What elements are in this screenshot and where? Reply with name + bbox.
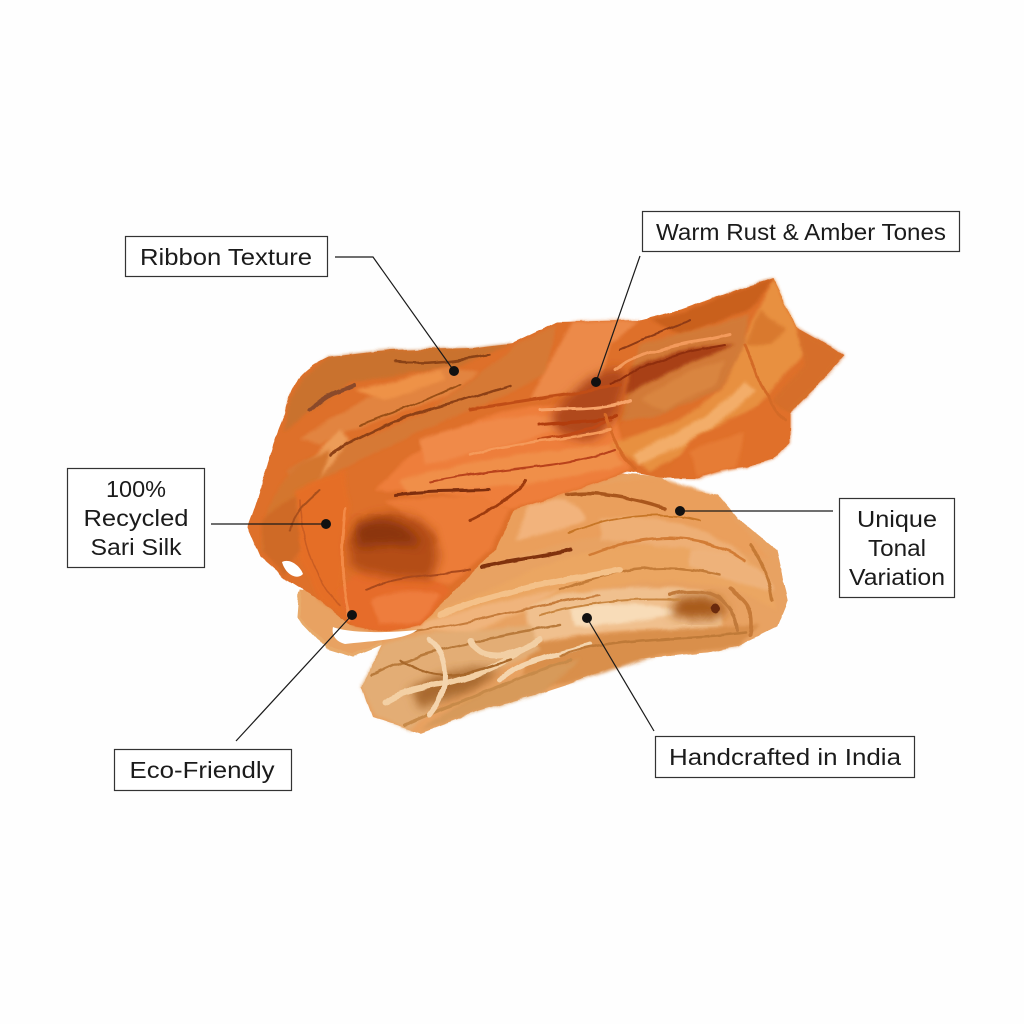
callout: 100% Recycled Sari Silk [68, 468, 331, 568]
gap: small hole at left [282, 561, 303, 577]
upper rust orange skein [247, 279, 845, 632]
right big band [610, 279, 805, 472]
upper peach panel [530, 320, 640, 400]
callout: 100% Recycled Sari Silk: Sari Silk [90, 534, 182, 560]
illustration: bundle of sari silk ribbon [247, 279, 845, 733]
callout: Eco-Friendly: Eco-Friendly [130, 757, 275, 783]
callout: Handcrafted in India: Handcrafted in India [669, 744, 902, 770]
callout: Eco-Friendly [114, 610, 357, 790]
upper-middle orange [385, 495, 510, 585]
callout: Unique Tonal Variation: Variation [849, 564, 945, 590]
callout: Unique Tonal Variation: Tonal [868, 535, 926, 561]
callout: Warm Rust & Amber Tones [591, 212, 960, 387]
right fringe [768, 328, 845, 413]
bottom orange bowl [335, 565, 450, 632]
callout: Unique Tonal Variation [675, 498, 954, 598]
thin loop strand [298, 592, 383, 655]
central vivid ribbons [375, 400, 630, 510]
callout: Handcrafted in India [582, 613, 914, 778]
lower amber skein [298, 470, 788, 733]
callout: Ribbon Texture: Ribbon Texture [140, 244, 312, 270]
gap: between orange bowl and lower strand [333, 627, 417, 644]
dark cave [348, 513, 439, 580]
callout: 100% Recycled Sari Silk: 100% [106, 476, 166, 502]
knot [552, 369, 625, 440]
callout: 100% Recycled Sari Silk: Recycled [84, 505, 188, 531]
callout: Ribbon Texture [126, 236, 459, 376]
left panel [295, 470, 352, 622]
top tan cap [284, 343, 513, 432]
callout: Warm Rust & Amber Tones: Warm Rust & Amber Tones [656, 219, 946, 245]
callout: Unique Tonal Variation: Unique [857, 506, 937, 532]
